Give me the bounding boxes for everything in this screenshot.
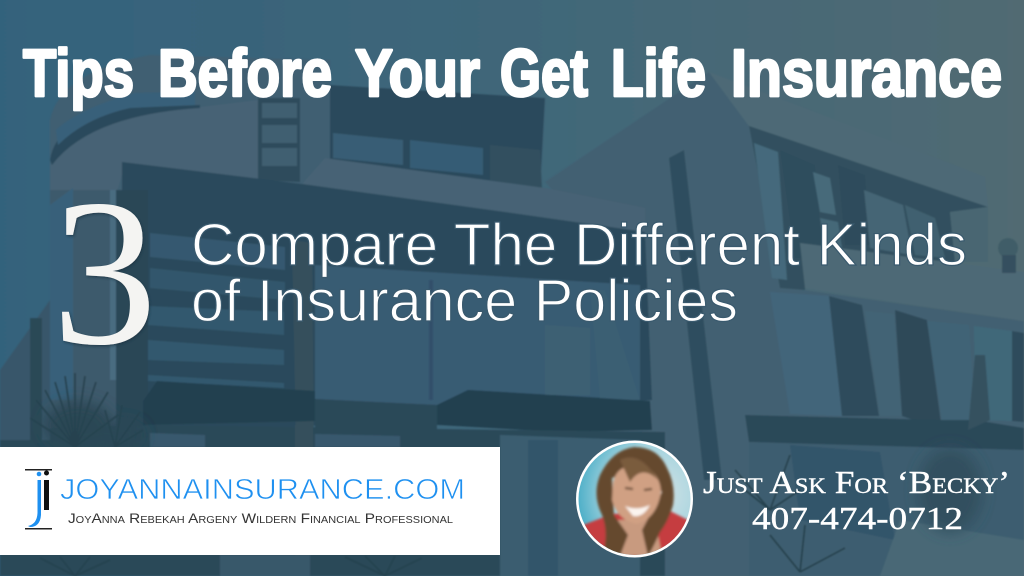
slatted windows — [116, 190, 314, 440]
upper balcony and roof — [302, 85, 645, 232]
tip text: of Insurance Policies — [191, 268, 738, 334]
title: Tips — [23, 36, 134, 111]
dark slabs — [0, 381, 665, 576]
brick strip and lower facade — [669, 150, 1024, 576]
palm plants — [30, 373, 845, 576]
title: Before — [158, 36, 332, 111]
tip text: Compare The Different Kinds — [191, 212, 967, 278]
potted plant on terrace — [998, 238, 1018, 273]
contact text — [703, 464, 1010, 536]
phone number: 407-474-0712 — [752, 500, 963, 536]
portrait: Becky — [575, 440, 695, 560]
glass balustrade — [315, 265, 640, 405]
tagline: JoyAnna Rebekah Argeny Wildern Financial Professional — [68, 510, 453, 526]
dark beam — [122, 162, 652, 440]
title — [23, 36, 1002, 111]
icon: ji monogram — [25, 469, 52, 530]
right building wall — [545, 72, 1024, 576]
number 3: 3 — [52, 157, 157, 389]
panel: logo card — [0, 447, 500, 555]
contact name: Just Ask For ‘Becky’ — [703, 464, 1010, 500]
title: Your — [355, 36, 480, 111]
left fence and post — [0, 300, 50, 443]
tip text — [191, 212, 967, 334]
title: Life — [611, 36, 706, 111]
website name: JOYANNAINSURANCE.COM — [60, 474, 465, 506]
title: Get — [500, 36, 588, 111]
round tower — [50, 55, 330, 440]
